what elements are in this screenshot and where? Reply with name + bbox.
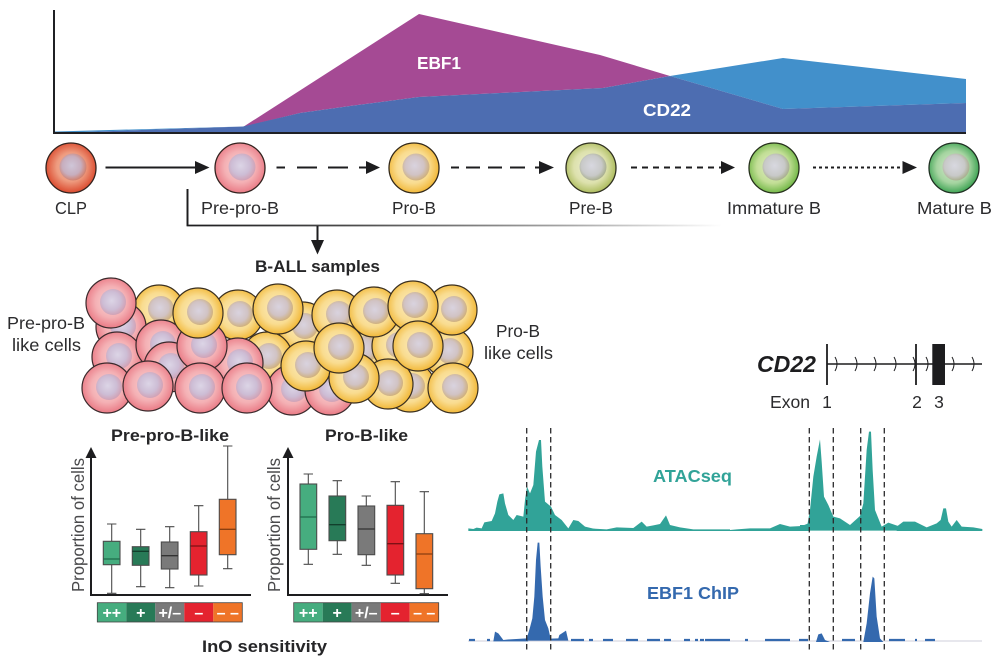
peak profile: CD22 right flank [897, 508, 982, 531]
peak profile: promoter-upstream region [468, 440, 595, 531]
peak profile right [816, 577, 883, 642]
legend: InO sensitivity scale: – [194, 605, 203, 622]
label: Pre-pro-B like cells: like cells [12, 335, 81, 355]
heading: Pre-pro-B-like: Pre-pro-B-like [111, 426, 229, 445]
small upstream bump [493, 632, 528, 641]
label: CD22: CD22 [643, 100, 691, 120]
arrow: Pro-B to Pre-B [451, 161, 554, 174]
box: +/- [358, 496, 375, 565]
arrow: Pre-B to Immature B [631, 161, 735, 174]
box: -- [219, 446, 236, 569]
label: Pre-pro-B: Pre-pro-B [201, 198, 279, 218]
cell: Pre-pro-B [215, 143, 265, 193]
label: Pre-B: Pre-B [569, 198, 613, 218]
cell: Immature B [749, 143, 799, 193]
box: - [190, 506, 207, 586]
box: + [329, 481, 346, 554]
legend: InO sensitivity scale [97, 603, 242, 622]
legend: InO sensitivity scale: – – [217, 605, 239, 622]
label: ATACseq: ATACseq [653, 466, 732, 486]
label: Mature B: Mature B [917, 198, 992, 218]
label: Pro-B: Pro-B [392, 198, 436, 218]
legend: InO sensitivity scale: ++ [299, 605, 318, 622]
label: Pre-pro-B like cells: Pre-pro-B [7, 313, 85, 333]
arrow: CLP to Pre-pro-B [106, 161, 210, 174]
label: EBF1 ChIP: EBF1 ChIP [647, 583, 739, 603]
label: Pro-B like cells: Pro-B [496, 321, 540, 341]
exon labels: 1 [822, 392, 832, 412]
y axis label: Proportion of cells [264, 458, 284, 592]
peak profile left [526, 543, 568, 641]
legend: InO sensitivity scale: +/– [158, 605, 181, 622]
cell cluster: B-ALL samples [82, 278, 478, 415]
box: - [387, 482, 404, 583]
box: -- [416, 492, 433, 594]
box: ++ [103, 524, 120, 593]
cell: Pro-B [389, 143, 439, 193]
exon labels: 3 [934, 392, 944, 412]
axes [282, 447, 448, 595]
peak profile: CD22 exon peaks [800, 432, 900, 531]
label: Immature B: Immature B [727, 198, 821, 218]
cell: Pre-B [566, 143, 616, 193]
gene diagram: CD22 [757, 344, 982, 412]
gene name: CD22 [757, 351, 816, 377]
label: EBF1: EBF1 [417, 53, 461, 73]
exon labels: 2 [912, 392, 922, 412]
EBF1 ChIP track [468, 543, 982, 642]
box plot: Pro-B-like [264, 447, 448, 622]
bracket arrow to B-ALL samples [188, 189, 722, 254]
area chart: EBF1 and CD22 expression [54, 10, 966, 133]
y axis label: Proportion of cells [68, 458, 88, 592]
legend: InO sensitivity scale [294, 603, 439, 622]
axes [86, 447, 251, 595]
label: Pre-pro-B like cells [7, 313, 85, 355]
legend: InO sensitivity scale: +/– [355, 605, 378, 622]
legend: InO sensitivity scale: + [333, 605, 342, 622]
dashed guides: peak regions [527, 428, 884, 652]
legend: InO sensitivity scale: + [136, 605, 145, 622]
gene model with exons [827, 344, 982, 385]
heading: B-ALL samples: B-ALL samples [255, 257, 380, 276]
label: Pro-B like cells: like cells [484, 343, 553, 363]
label: CLP: CLP [55, 198, 87, 218]
arrow: Pre-pro-B to Pro-B [276, 161, 380, 174]
box plot: Pre-pro-B-like [68, 446, 251, 622]
legend: InO sensitivity scale: – [391, 605, 400, 622]
box: ++ [300, 474, 317, 564]
heading: InO sensitivity: InO sensitivity [202, 637, 328, 656]
box: + [132, 529, 149, 587]
label: Pro-B like cells [484, 321, 553, 363]
arrow: Immature B to Mature B [813, 161, 917, 174]
low-level signal [469, 639, 935, 641]
exon labels [770, 392, 944, 412]
ATACseq track [468, 432, 982, 531]
cell: CLP [46, 143, 96, 193]
peak profile: middle region [593, 515, 730, 531]
cell: Mature B [929, 143, 979, 193]
peak profile: CD22 left flank [730, 523, 810, 531]
differentiation pathway [46, 143, 992, 218]
legend: InO sensitivity scale: ++ [102, 605, 121, 622]
legend: InO sensitivity scale: – – [413, 605, 435, 622]
heading: Pro-B-like: Pro-B-like [325, 426, 408, 445]
box: +/- [161, 527, 178, 588]
exon labels: Exon [770, 392, 810, 412]
